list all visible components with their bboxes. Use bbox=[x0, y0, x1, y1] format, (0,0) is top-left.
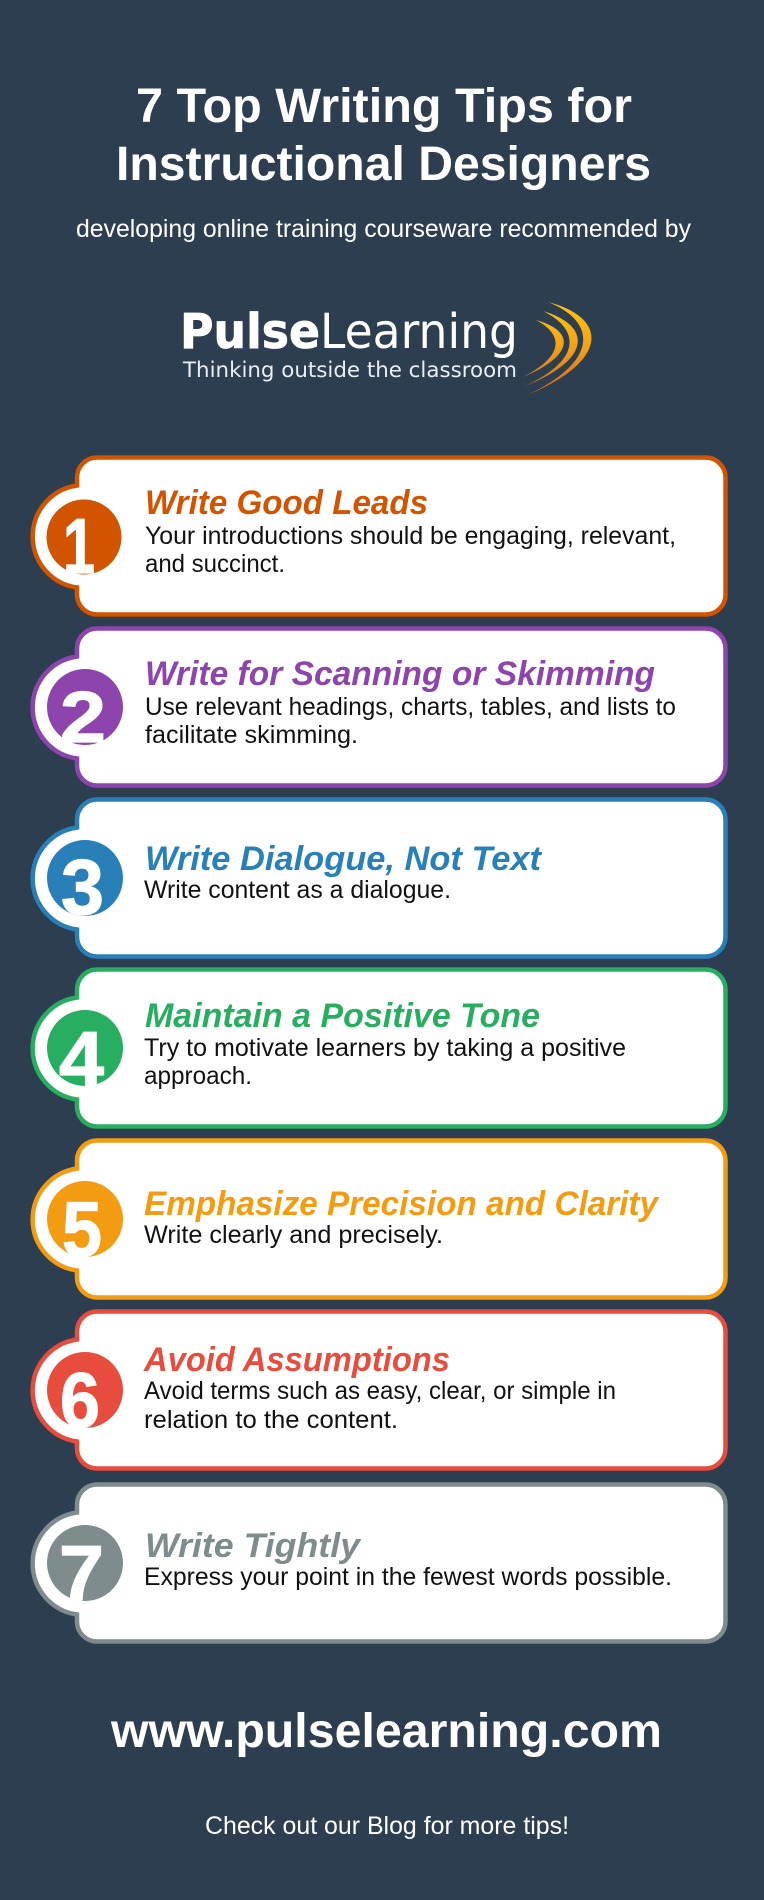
panel: tip 6: relation to the content. bbox=[144, 1406, 398, 1434]
panel: tip 5: Emphasize Precision and Clarity bbox=[144, 1185, 660, 1223]
panel: tip 2: 2 bbox=[60, 678, 106, 758]
title: Instructional Designers bbox=[116, 138, 651, 191]
panel: tip 4: Try to motivate learners by taking a positive bbox=[144, 1034, 626, 1062]
panel: tip 1: Your introductions should be engaging, relevant, bbox=[145, 522, 676, 550]
panel: tip 4: 4 bbox=[59, 1015, 104, 1103]
panel: tip 2: facilitate skimming. bbox=[145, 721, 358, 749]
panel: tip 3: Write Dialogue, Not Text bbox=[145, 840, 543, 878]
panel: tip 5 bbox=[33, 1140, 726, 1298]
panel: tip 7: Write Tightly bbox=[145, 1527, 362, 1565]
panel: tip 1: Write Good Leads bbox=[145, 484, 428, 522]
panel: tip 6: Avoid Assumptions bbox=[143, 1341, 450, 1379]
panel: tip 7: 7 bbox=[59, 1529, 104, 1617]
panel: tip 7 bbox=[33, 1484, 726, 1642]
logo: PulseLearning: Learning bbox=[320, 304, 518, 360]
title bbox=[116, 80, 651, 191]
panel: tip 6 bbox=[33, 1312, 726, 1468]
title: 7 Top Writing Tips for bbox=[136, 80, 632, 133]
panel: tip 1: and succinct. bbox=[145, 550, 285, 578]
panel: tip 4 bbox=[33, 970, 726, 1126]
panel: tip 6: Avoid terms such as easy, clear, or simple in bbox=[144, 1377, 616, 1405]
panel: tip 5: Write clearly and precisely. bbox=[144, 1221, 443, 1249]
panel: tip 4: Maintain a Positive Tone bbox=[145, 997, 540, 1035]
panel: tip 3: 3 bbox=[61, 843, 104, 931]
panel: tip 1 bbox=[33, 458, 726, 614]
subtitle: developing online training courseware recommended by bbox=[76, 215, 691, 243]
logo: PulseLearning: Thinking outside the classroom bbox=[182, 358, 517, 382]
panel: tip 3: Write content as a dialogue. bbox=[144, 876, 451, 904]
panel: tip 2: Use relevant headings, charts, tables, and lists to bbox=[145, 693, 676, 721]
website url: www.pulselearning.com bbox=[110, 1705, 662, 1758]
panel: tip 2 bbox=[33, 628, 726, 786]
panel: tip 3 bbox=[33, 800, 726, 956]
logo: PulseLearning bbox=[180, 302, 591, 395]
panel: tip 2: Write for Scanning or Skimming bbox=[145, 655, 655, 693]
panel: tip 1: 1 bbox=[63, 502, 95, 590]
panel: tip 6: 6 bbox=[60, 1356, 100, 1444]
panel: tip 4: approach. bbox=[144, 1062, 252, 1090]
panel: tip 5: 5 bbox=[62, 1185, 102, 1273]
blog callout: Check out our Blog for more tips! bbox=[205, 1812, 569, 1840]
panel: tip 7: Express your point in the fewest words possible. bbox=[144, 1563, 672, 1591]
logo: PulseLearning: Pulse bbox=[180, 304, 320, 360]
